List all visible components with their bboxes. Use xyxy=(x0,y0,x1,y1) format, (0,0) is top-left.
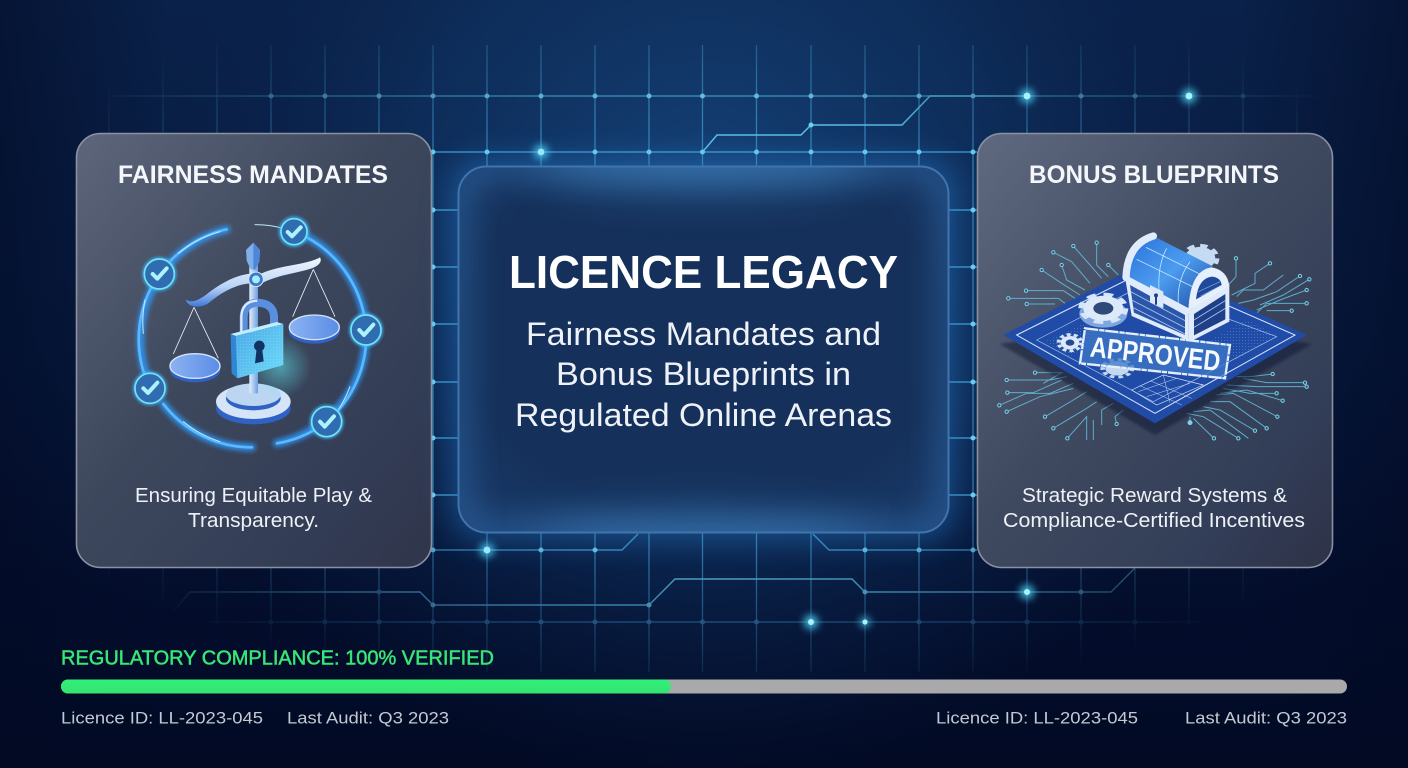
central panel glow xyxy=(452,160,955,540)
circuit grid background xyxy=(60,45,1350,672)
title: LICENCE LEGACY xyxy=(509,246,898,298)
central panel border xyxy=(458,166,948,532)
central panel background xyxy=(458,166,949,533)
description: fairness mandates xyxy=(135,485,373,532)
glowing circuit nodes xyxy=(480,89,1196,629)
circuit traces around blueprint xyxy=(999,243,1309,440)
description: bonus blueprints xyxy=(1003,485,1305,532)
icon: scales with padlock and check ring xyxy=(133,216,383,447)
icon: blueprint, treasure chest and approved stamp xyxy=(998,236,1312,440)
heading: bonus blueprints: BONUS BLUEPRINTS xyxy=(1029,161,1279,189)
footer: last audit left: Last Audit: Q3 2023 xyxy=(287,708,449,728)
gears xyxy=(1059,246,1217,377)
description: bonus blueprints: Compliance-Certified Incentives xyxy=(1003,510,1305,532)
compliance label: REGULATORY COMPLIANCE: 100% VERIFIED xyxy=(61,646,494,670)
compliance status xyxy=(61,646,1347,728)
panel: bonus blueprints xyxy=(978,134,1332,568)
scale post xyxy=(246,243,260,393)
description: fairness mandates: Ensuring Equitable Play & xyxy=(135,485,373,507)
subtitle xyxy=(515,316,892,433)
left pan xyxy=(170,307,220,382)
subtitle: Bonus Blueprints in xyxy=(556,356,851,392)
description: fairness mandates: Transparency. xyxy=(188,510,319,532)
footer: licence id left: Licence ID: LL-2023-045 xyxy=(61,708,263,728)
central panel edge highlights xyxy=(458,166,948,532)
scale pivot xyxy=(249,272,263,287)
subtitle: Regulated Online Arenas xyxy=(515,397,892,433)
heading: fairness mandates: FAIRNESS MANDATES xyxy=(118,161,388,189)
panel background: bonus blueprints xyxy=(978,134,1332,568)
subtitle: Fairness Mandates and xyxy=(526,316,881,352)
footer: licence id right: Licence ID: LL-2023-045 xyxy=(936,708,1138,728)
footer: last audit right: Last Audit: Q3 2023 xyxy=(1185,708,1347,728)
approved stamp: APPROVED xyxy=(1089,331,1222,378)
blueprint sheet xyxy=(1000,262,1312,435)
treasure chest xyxy=(1125,236,1229,341)
progress track xyxy=(61,680,1347,694)
padlock xyxy=(231,301,312,398)
panel: central title xyxy=(452,134,955,564)
central inner glow xyxy=(460,168,948,532)
check badges xyxy=(133,216,383,439)
scale beam xyxy=(186,257,321,307)
description: bonus blueprints: Strategic Reward Systems & xyxy=(1022,485,1288,507)
scale base xyxy=(216,383,291,424)
panel background: fairness mandates xyxy=(76,134,432,568)
panel: fairness mandates xyxy=(76,134,432,568)
progress fill xyxy=(61,680,671,694)
right pan xyxy=(289,269,340,344)
circuit trace ends xyxy=(998,241,1311,440)
ring glow xyxy=(139,225,366,447)
